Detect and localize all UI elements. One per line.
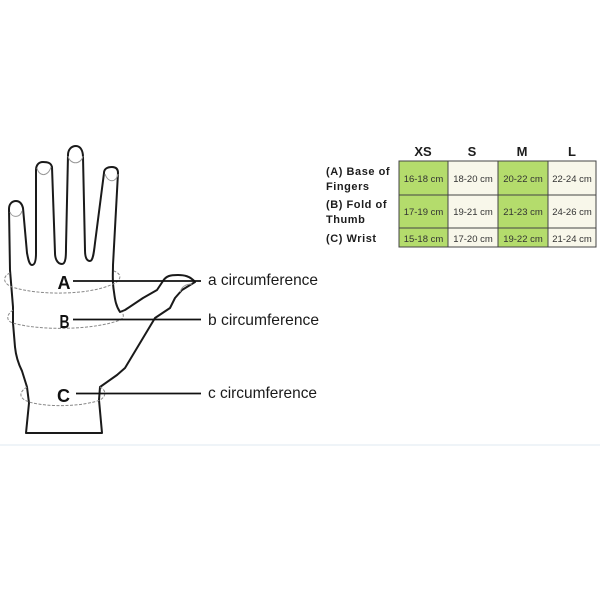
label C with line bbox=[57, 385, 317, 406]
label B with line: B bbox=[60, 312, 70, 332]
hand outline bbox=[9, 146, 195, 433]
table values: 24-26 cm bbox=[552, 207, 592, 218]
row headings: (A) Base of bbox=[326, 166, 390, 178]
measurement band C bbox=[21, 387, 105, 406]
table values bbox=[404, 174, 592, 245]
label B with line: b circumference bbox=[208, 312, 319, 329]
label C with line: c circumference bbox=[208, 385, 317, 402]
label B with line bbox=[60, 312, 319, 332]
column headings: M bbox=[517, 144, 527, 159]
table values: 18-20 cm bbox=[453, 174, 493, 185]
table values: 22-24 cm bbox=[552, 174, 592, 185]
column headings: L bbox=[568, 144, 576, 159]
measurement band B bbox=[8, 310, 123, 328]
table values: 21-24 cm bbox=[552, 234, 592, 245]
row headings: (C) Wrist bbox=[326, 233, 377, 245]
table values: 17-19 cm bbox=[404, 207, 443, 218]
measurement band A bbox=[5, 271, 120, 293]
row headings: (B) Fold of bbox=[326, 199, 387, 211]
bottom rule bbox=[0, 444, 600, 446]
column headings bbox=[414, 144, 576, 159]
table values: 19-22 cm bbox=[503, 234, 543, 245]
table values: 15-18 cm bbox=[404, 234, 443, 245]
row headings bbox=[326, 166, 390, 245]
table values: 19-21 cm bbox=[453, 207, 493, 218]
label A with line bbox=[58, 272, 318, 293]
size table bbox=[326, 144, 596, 247]
table values: 17-20 cm bbox=[453, 234, 493, 245]
table values: 16-18 cm bbox=[404, 174, 443, 185]
column headings: S bbox=[468, 144, 477, 159]
table cells bbox=[399, 161, 596, 247]
fingernails bbox=[10, 156, 192, 292]
label A with line: a circumference bbox=[208, 272, 318, 289]
row headings: Fingers bbox=[326, 181, 370, 193]
column headings: XS bbox=[414, 144, 432, 159]
table values: 21-23 cm bbox=[503, 207, 543, 218]
label C with line: C bbox=[57, 386, 70, 406]
row headings: Thumb bbox=[326, 214, 365, 226]
label A with line: A bbox=[58, 273, 70, 293]
table values: 20-22 cm bbox=[503, 174, 543, 185]
